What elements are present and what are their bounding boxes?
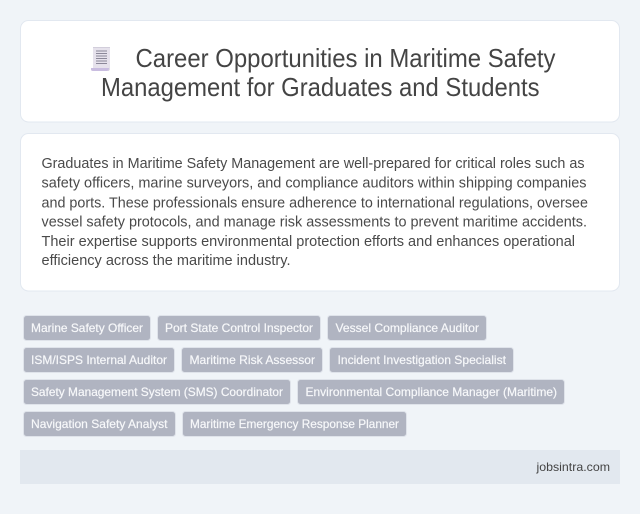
icon: document scroll: [91, 47, 110, 71]
tag: Navigation Safety Analyst: Navigation Safety Analyst: [31, 417, 168, 431]
title heading: Career Opportunities in Maritime Safety: [136, 45, 556, 73]
description text: safety officers, marine surveyors, and compliance auditors within shipping companies: [42, 176, 586, 192]
description text: efficiency across the maritime industry.: [42, 253, 290, 269]
title heading: [101, 45, 556, 102]
career tags: [24, 316, 564, 436]
tag: Vessel Compliance Auditor: [328, 316, 486, 340]
tag: Marine Safety Officer: [24, 316, 150, 340]
footer bar: [20, 450, 620, 484]
tag: Incident Investigation Specialist: Incident Investigation Specialist: [338, 353, 507, 367]
footer source text: jobsintra.com: [535, 460, 610, 474]
description text: Graduates in Maritime Safety Management are well-prepared for critical roles such as: [42, 156, 584, 172]
tag: Port State Control Inspector: Port State Control Inspector: [165, 321, 313, 335]
tag: Port State Control Inspector: [158, 316, 320, 340]
tag: Safety Management System (SMS) Coordinator: Safety Management System (SMS) Coordinator: [31, 385, 283, 399]
description text: [42, 156, 588, 269]
tag: Environmental Compliance Manager (Maritime): [298, 380, 564, 404]
panel: description card: [20, 134, 620, 291]
panel: title card: [20, 20, 620, 122]
tag: Safety Management System (SMS) Coordinator: [24, 380, 290, 404]
tag: Maritime Emergency Response Planner: Maritime Emergency Response Planner: [190, 417, 399, 431]
tag: Incident Investigation Specialist: [330, 348, 514, 372]
description text: Their expertise supports environmental protection efforts and enhances operational: [42, 234, 575, 250]
title heading: Management for Graduates and Students: [101, 74, 540, 102]
description text: vessel safety protocols, and manage risk assessments to prevent maritime accidents.: [42, 214, 587, 230]
tag: Vessel Compliance Auditor: Vessel Compliance Auditor: [336, 321, 479, 335]
tag: Navigation Safety Analyst: [24, 412, 176, 436]
tag: ISM/ISPS Internal Auditor: ISM/ISPS Internal Auditor: [31, 353, 167, 367]
tag: Maritime Risk Assessor: Maritime Risk Assessor: [190, 353, 315, 367]
tag: Maritime Risk Assessor: [182, 348, 322, 372]
tag: Maritime Emergency Response Planner: [182, 412, 406, 436]
tag: Marine Safety Officer: Marine Safety Officer: [31, 321, 143, 335]
description text: and ports. These professionals ensure adherence to international regulations, oversee: [42, 196, 588, 212]
tag: Environmental Compliance Manager (Maritime): Environmental Compliance Manager (Maritime): [306, 385, 557, 399]
tag: ISM/ISPS Internal Auditor: [24, 348, 174, 372]
